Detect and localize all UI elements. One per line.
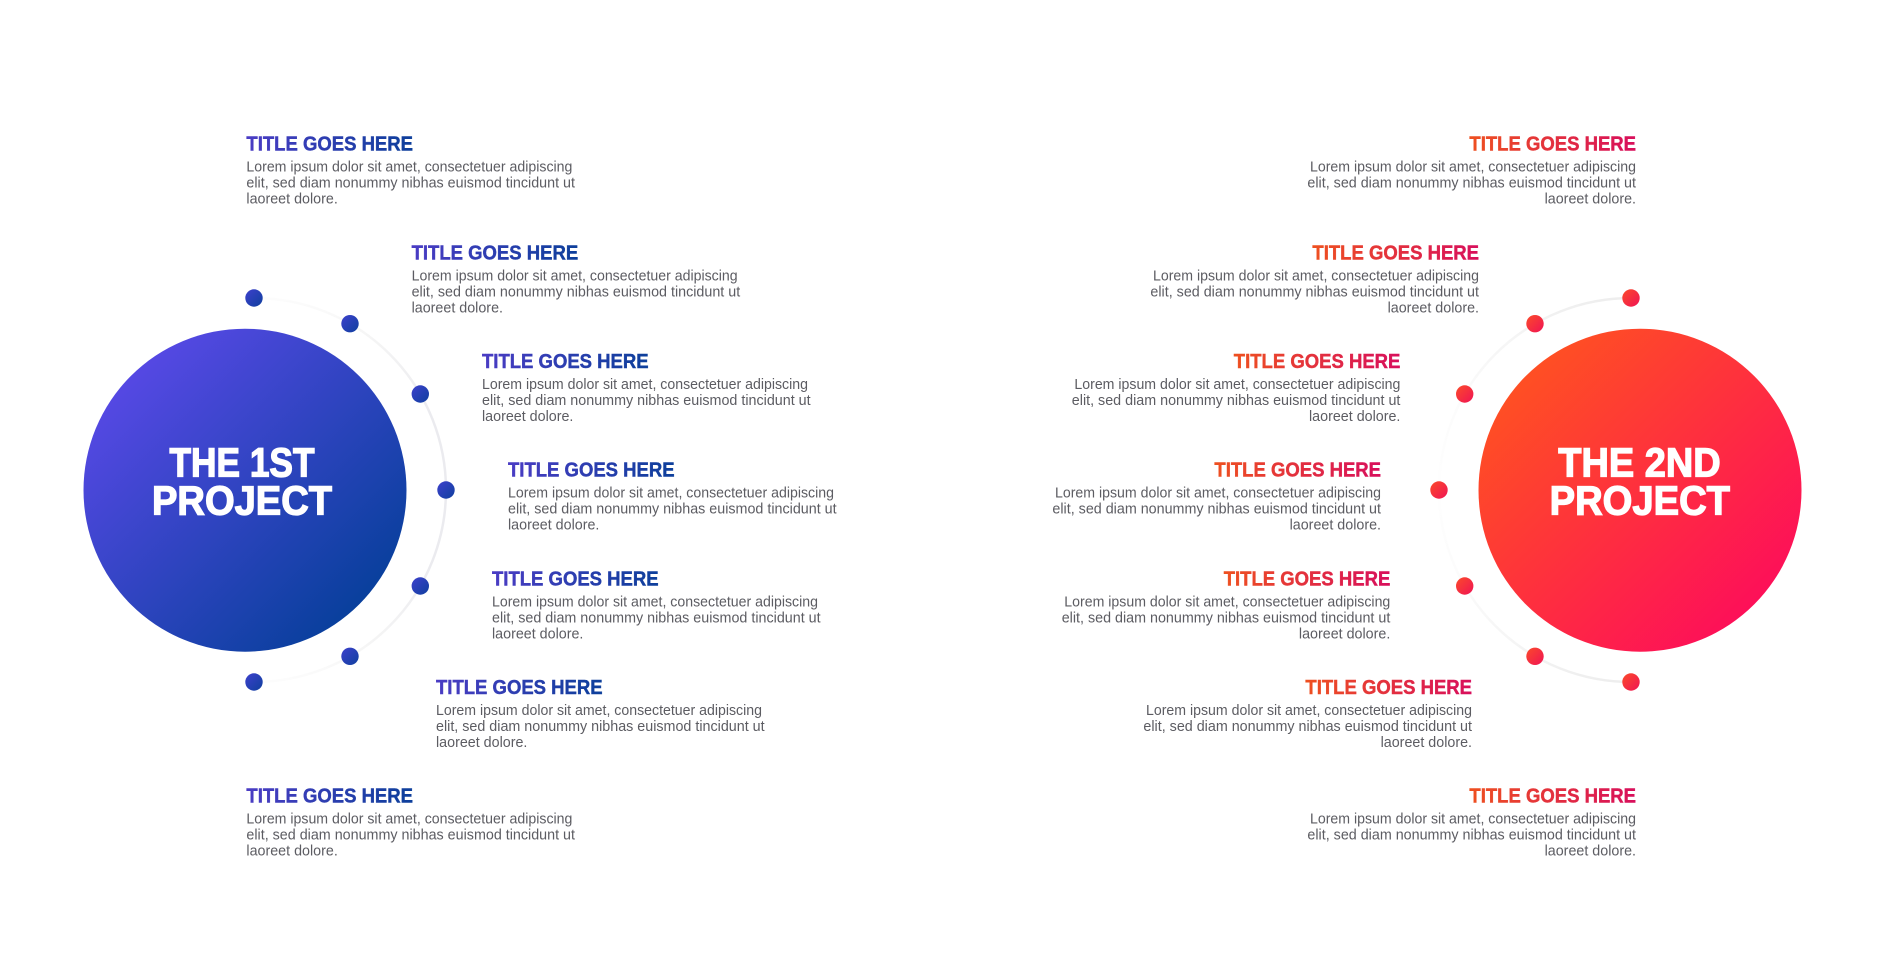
text block: first project item 1: TITLE GOES HERE [246,133,413,156]
heading: the 2nd project [1550,440,1730,523]
text block: first project item 6 [436,676,765,751]
text block: second project item 1: laoreet dolore. [1545,192,1636,208]
text block: second project item 7: laoreet dolore. [1545,844,1636,860]
text block: first project item 3: Lorem ipsum dolor sit amet, consectetuer adipiscing [482,377,808,393]
text block: first project item 1 [246,133,575,208]
text block: second project item 5 [1062,567,1390,642]
text block: first project item 7: laoreet dolore. [246,844,338,860]
text block: second project item 4: elit, sed diam nonummy nibhas euismod tincidunt ut [1052,502,1381,518]
text block: second project item 7: TITLE GOES HERE [1469,785,1636,808]
text block: first project item 1: laoreet dolore. [246,192,338,208]
text block: second project item 4: laoreet dolore. [1290,518,1381,534]
text block: second project item 7: Lorem ipsum dolor sit amet, consectetuer adipiscing [1310,812,1636,828]
text block: first project item 5 [492,567,821,642]
text block: first project item 5: elit, sed diam nonummy nibhas euismod tincidunt ut [492,610,821,626]
circle: the 1st project [84,329,406,652]
text block: first project item 4: TITLE GOES HERE [508,459,675,482]
text block: first project item 5: Lorem ipsum dolor sit amet, consectetuer adipiscing [492,594,818,610]
text block: second project item 2: Lorem ipsum dolor sit amet, consectetuer adipiscing [1153,268,1479,284]
text block: second project item 1 [1307,133,1636,208]
connector arc: first project [254,298,446,682]
text block: first project item 5: laoreet dolore. [492,626,583,642]
heading: the 1st project [152,440,332,523]
text block: first project item 7: Lorem ipsum dolor sit amet, consectetuer adipiscing [246,812,572,828]
text block: second project item 5: TITLE GOES HERE [1224,567,1390,590]
text block: first project item 3: TITLE GOES HERE [482,350,649,373]
text block: first project item 6: Lorem ipsum dolor sit amet, consectetuer adipiscing [436,703,762,719]
connector arc: second project [1439,298,1631,682]
text block: first project item 4 [508,459,837,534]
text block: first project item 4: Lorem ipsum dolor sit amet, consectetuer adipiscing [508,486,834,502]
text block: first project item 5: TITLE GOES HERE [492,567,659,590]
text block: second project item 6: elit, sed diam nonummy nibhas euismod tincidunt ut [1143,719,1472,735]
text block: first project item 6: elit, sed diam nonummy nibhas euismod tincidunt ut [436,719,765,735]
text block: second project item 4: TITLE GOES HERE [1214,459,1381,482]
text block: first project item 6: TITLE GOES HERE [436,676,603,699]
panel: first project [84,133,837,860]
timeline dots: first project [245,289,455,691]
text block: second project item 3: TITLE GOES HERE [1234,350,1400,373]
text block: first project item 1: Lorem ipsum dolor sit amet, consectetuer adipiscing [246,160,572,176]
text block: first project item 3 [482,350,811,425]
text block: first project item 4: elit, sed diam nonummy nibhas euismod tincidunt ut [508,502,837,518]
text block: first project item 2: Lorem ipsum dolor sit amet, consectetuer adipiscing [412,268,738,284]
text block: second project item 4 [1052,459,1381,534]
text block: second project item 5: elit, sed diam nonummy nibhas euismod tincidunt ut [1062,610,1390,626]
text block: second project item 1: Lorem ipsum dolor sit amet, consectetuer adipiscing [1310,160,1636,176]
text block: second project item 5: laoreet dolore. [1299,626,1390,642]
text block: second project item 4: Lorem ipsum dolor sit amet, consectetuer adipiscing [1055,486,1381,502]
text block: second project item 3: Lorem ipsum dolor sit amet, consectetuer adipiscing [1074,377,1400,393]
text block: second project item 2 [1150,241,1479,316]
text block: second project item 3: laoreet dolore. [1309,409,1400,425]
heading: the 1st project: THE 1ST [170,440,315,486]
heading: the 1st project: PROJECT [152,477,332,523]
text block: first project item 2 [412,241,740,316]
text block: second project item 7 [1307,785,1636,860]
text block: second project item 7: elit, sed diam nonummy nibhas euismod tincidunt ut [1307,828,1636,844]
text block: second project item 6: laoreet dolore. [1381,735,1472,751]
circle: the 2nd project [1478,329,1802,652]
panel: second project [1052,133,1802,860]
heading: the 2nd project: THE 2ND [1558,440,1721,486]
text block: first project item 2: laoreet dolore. [412,300,503,316]
text block: second project item 2: laoreet dolore. [1388,300,1479,316]
text block: second project item 6: TITLE GOES HERE [1305,676,1472,699]
text block: first project item 2: TITLE GOES HERE [412,241,578,264]
heading: the 2nd project: PROJECT [1550,477,1730,523]
text block: second project item 2: TITLE GOES HERE [1312,241,1479,264]
text block: first project item 1: elit, sed diam nonummy nibhas euismod tincidunt ut [246,176,575,192]
text block: second project item 1: elit, sed diam nonummy nibhas euismod tincidunt ut [1307,176,1636,192]
text block: first project item 3: laoreet dolore. [482,409,573,425]
timeline dots: second project [1430,289,1640,691]
text block: first project item 7: TITLE GOES HERE [246,785,413,808]
text block: first project item 7 [246,785,575,860]
text block: second project item 1: TITLE GOES HERE [1469,133,1636,156]
text block: first project item 7: elit, sed diam nonummy nibhas euismod tincidunt ut [246,828,575,844]
text block: second project item 6: Lorem ipsum dolor sit amet, consectetuer adipiscing [1146,703,1472,719]
text block: first project item 2: elit, sed diam nonummy nibhas euismod tincidunt ut [412,284,740,300]
text block: second project item 2: elit, sed diam nonummy nibhas euismod tincidunt ut [1150,284,1479,300]
text block: second project item 5: Lorem ipsum dolor sit amet, consectetuer adipiscing [1064,594,1390,610]
text block: first project item 4: laoreet dolore. [508,518,599,534]
text block: first project item 6: laoreet dolore. [436,735,527,751]
text block: second project item 6 [1143,676,1472,751]
text block: second project item 3 [1072,350,1400,425]
text block: first project item 3: elit, sed diam nonummy nibhas euismod tincidunt ut [482,393,811,409]
text block: second project item 3: elit, sed diam nonummy nibhas euismod tincidunt ut [1072,393,1400,409]
